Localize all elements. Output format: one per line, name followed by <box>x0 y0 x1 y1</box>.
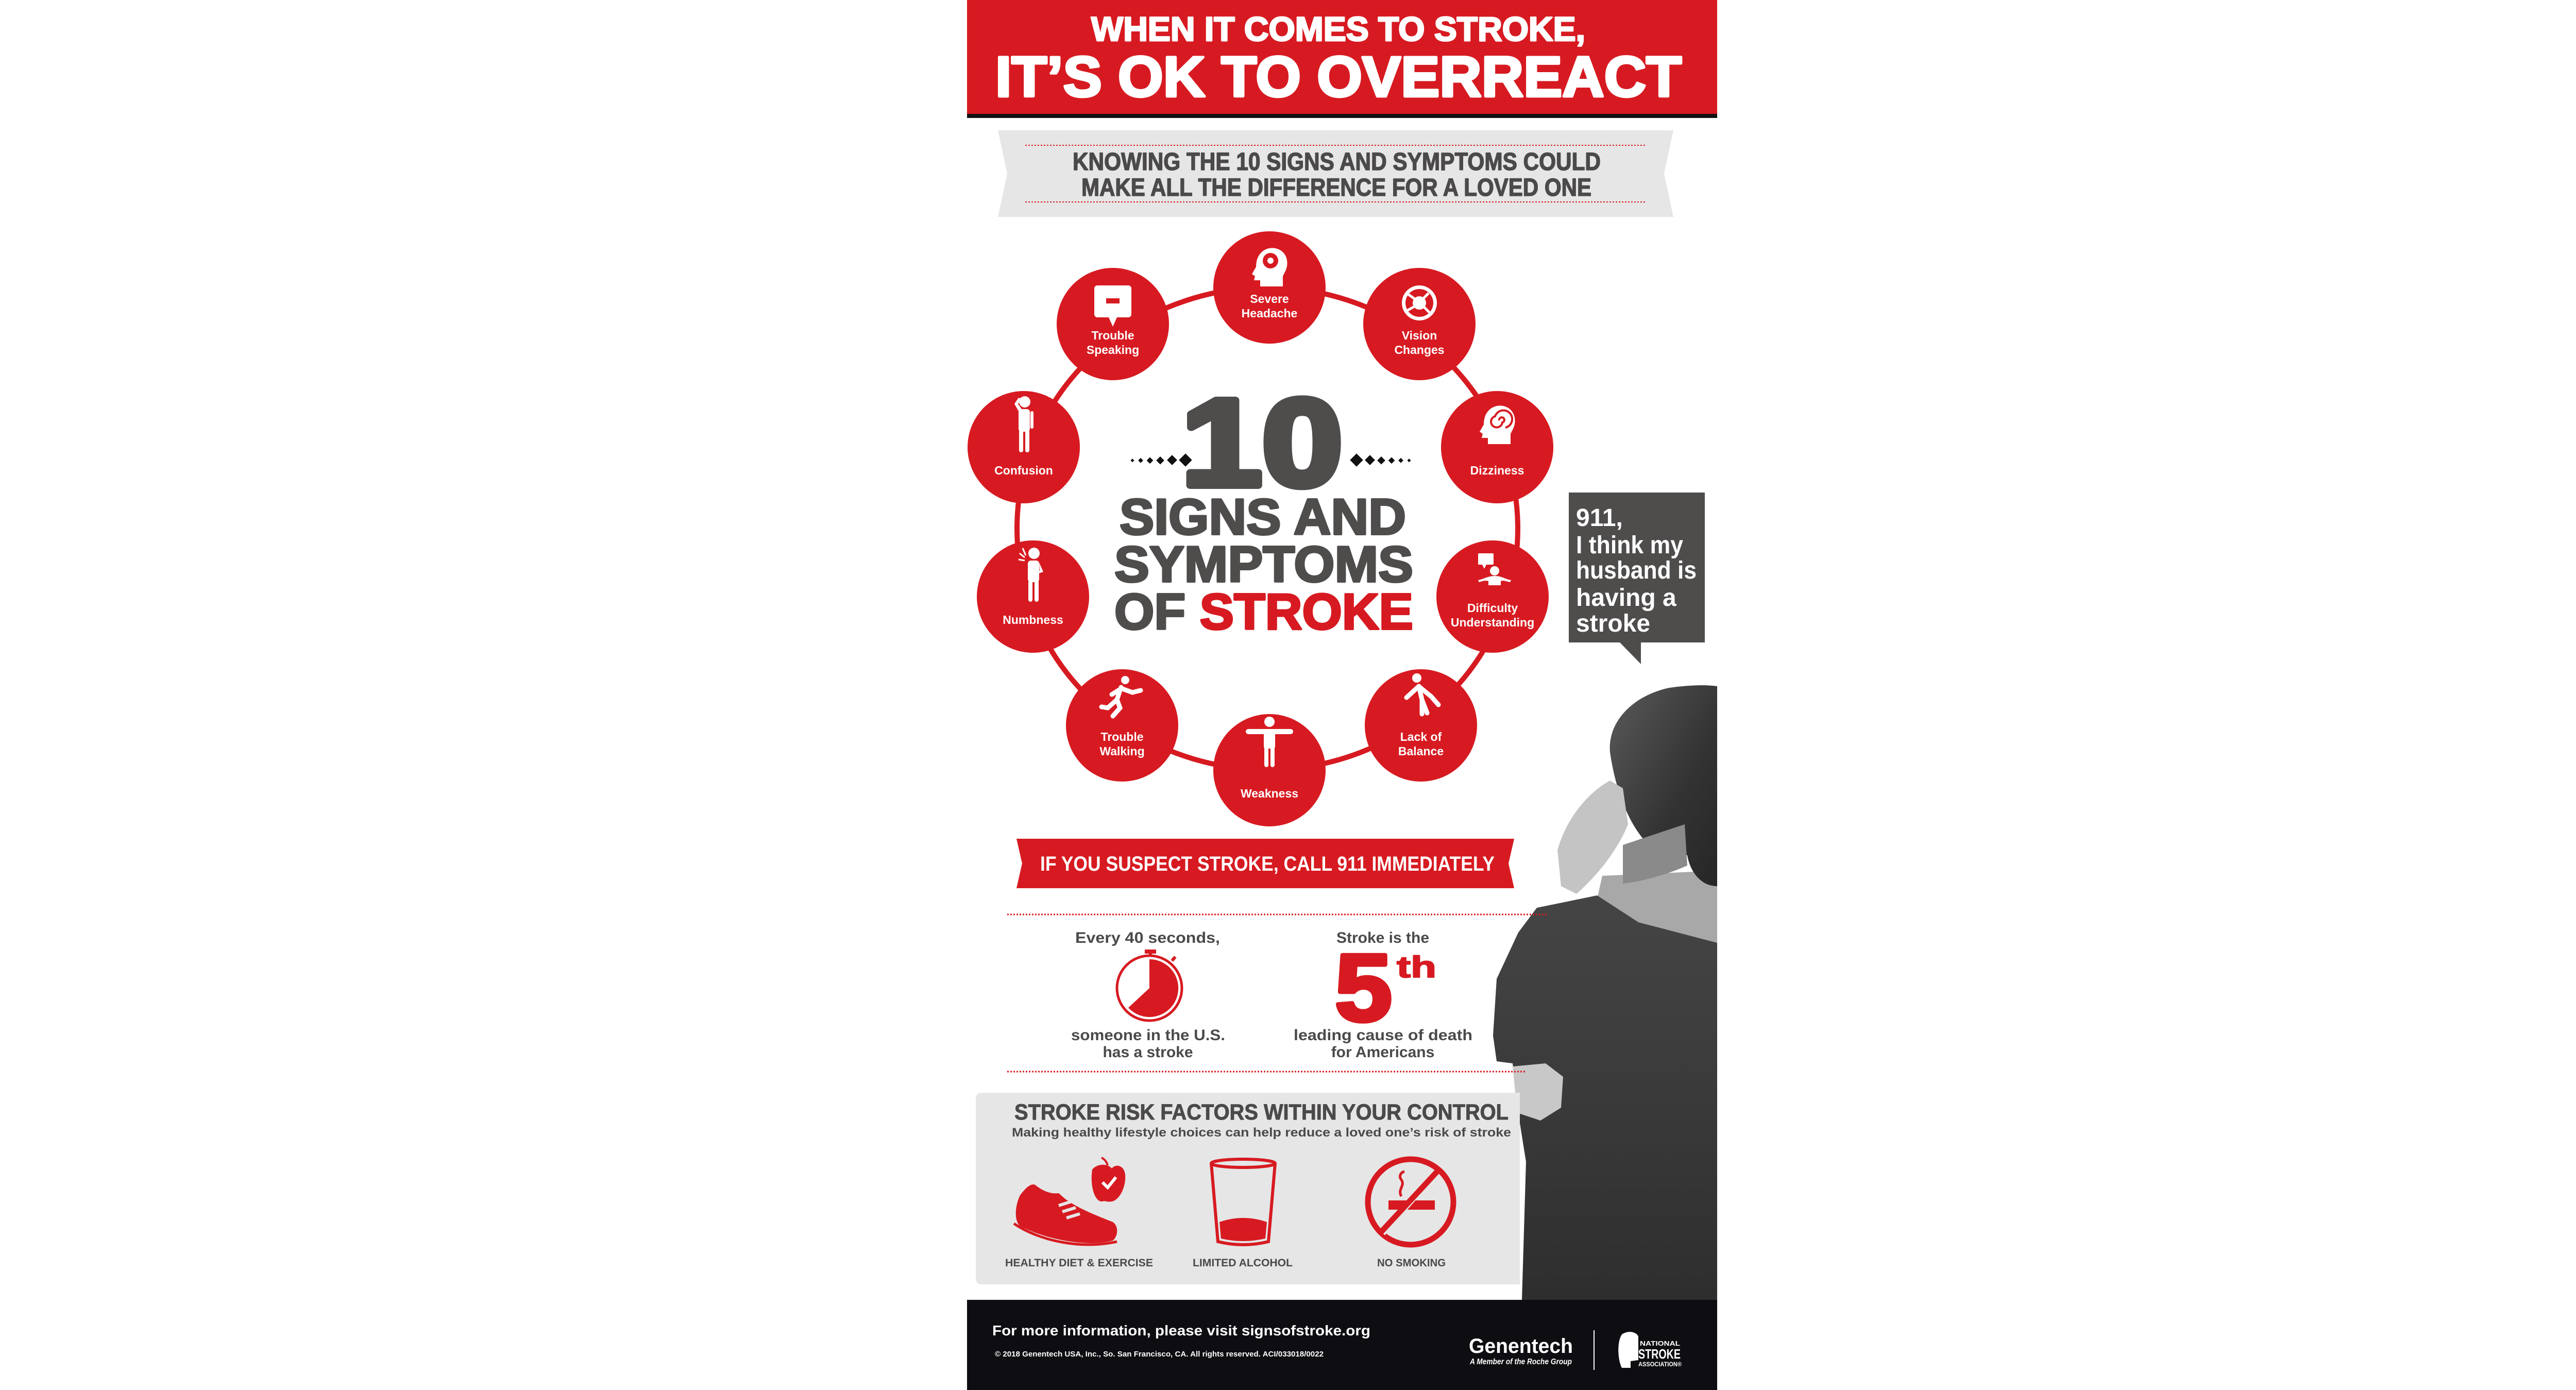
footer: For more information, please visit signsofstroke.org <box>992 1323 1370 1338</box>
symptom: dizziness <box>1441 391 1553 503</box>
symptom: lack of balance: Lack of <box>1400 730 1442 743</box>
symptom: weakness: Weakness <box>1241 787 1298 800</box>
title line 1: WHEN IT COMES TO STROKE, <box>1091 10 1585 48</box>
icon labels: HEALTHY DIET & EXERCISE <box>1005 1257 1153 1269</box>
panel: risk factors <box>976 1093 1520 1284</box>
logo: National Stroke Association: STROKE <box>1638 1346 1681 1362</box>
speech bubble: 911 call: I think my <box>1576 532 1683 559</box>
symptom: severe headache: Headache <box>1242 307 1297 320</box>
icon: person off balance <box>1406 673 1438 714</box>
icon: speech bubble <box>1094 285 1131 327</box>
logo: Genentech: Genentech <box>1469 1335 1573 1358</box>
stat: every 40 seconds <box>1071 929 1225 1061</box>
panel: risk factors: LIMITED ALCOHOL <box>1193 1257 1293 1269</box>
symptom: lack of balance <box>1365 669 1477 782</box>
symptom: vision changes <box>1363 268 1476 380</box>
icon: person scratching head <box>1014 396 1033 452</box>
speech bubble: 911 call <box>1569 493 1705 664</box>
speech bubble: 911 call: husband is <box>1576 557 1697 584</box>
icon: no smoking <box>1368 1159 1453 1245</box>
stat: every 40 seconds: has a stroke <box>1103 1044 1193 1061</box>
logo: Genentech: A Member of the Roche Group <box>1469 1358 1572 1366</box>
subtitle banner: KNOWING THE 10 SIGNS AND SYMPTOMS COULD <box>1073 148 1601 176</box>
center title: 10 signs and symptoms of stroke: OF STROKE <box>1114 583 1413 640</box>
icon: head with spiral <box>1480 405 1515 444</box>
symptom: trouble speaking <box>1057 268 1169 380</box>
speech bubble: 911 call: 911, <box>1576 504 1623 532</box>
symptom: trouble walking: Trouble <box>1100 730 1144 743</box>
symptom: lack of balance: Balance <box>1398 744 1444 758</box>
icon: stopwatch <box>1117 950 1182 1021</box>
hand at phone <box>1557 781 1628 894</box>
symptom: difficulty understanding <box>1436 540 1549 653</box>
center title: 10 signs and symptoms of stroke: SIGNS AND <box>1120 488 1406 545</box>
scarf <box>1623 824 1687 884</box>
sweater <box>1493 895 1717 1300</box>
symptom: confusion <box>968 391 1080 503</box>
icon: person stumbling <box>1101 676 1141 716</box>
speech bubble: 911 call: having a <box>1576 584 1676 612</box>
symptom: numbness <box>977 540 1089 653</box>
call 911 banner <box>1016 839 1514 888</box>
stat: 5th leading cause <box>1294 929 1472 1061</box>
hair <box>1610 685 1717 886</box>
symptom: confusion: Confusion <box>994 464 1053 477</box>
stat: 5th leading cause: leading cause of death <box>1294 1027 1472 1044</box>
logo: National Stroke Association: ASSOCIATION® <box>1638 1361 1682 1368</box>
symptom: difficulty understanding: Understanding <box>1451 616 1534 629</box>
center title: 10 signs and symptoms of stroke: 10 <box>1181 374 1343 512</box>
heading: STROKE RISK FACTORS WITHIN YOUR CONTROL <box>1014 1100 1509 1125</box>
symptom: trouble speaking: Speaking <box>1087 343 1139 357</box>
speech bubble: 911 call: stroke <box>1576 610 1650 637</box>
stat: 5th leading cause: 5 <box>1335 935 1392 1041</box>
footer: © 2018 Genentech USA, Inc., So. San Francisco, CA. All rights reserved. ACI/033018/0022 <box>995 1350 1324 1359</box>
icon: person with speech bubble <box>1478 553 1511 585</box>
center title: 10 signs and symptoms of stroke: SYMPTOMS <box>1114 536 1413 592</box>
icon: head with gear <box>1252 248 1287 286</box>
subtitle banner <box>998 130 1673 217</box>
title line 2: IT’S OK TO OVERREACT <box>995 45 1682 109</box>
symptom: dizziness: Dizziness <box>1470 464 1524 477</box>
skin of back/neck <box>1597 871 1717 943</box>
logo: National Stroke Association <box>1618 1332 1682 1368</box>
stat: every 40 seconds: Every 40 seconds, <box>1075 929 1220 946</box>
header banner <box>967 0 1717 118</box>
call 911 banner: IF YOU SUSPECT STROKE, CALL 911 IMMEDIATELY <box>1040 853 1495 875</box>
symptom: vision changes: Changes <box>1394 343 1445 357</box>
center title: 10 signs and symptoms of stroke <box>1114 374 1413 640</box>
hand at waist <box>1513 1063 1563 1121</box>
footer <box>967 1300 1717 1390</box>
symptom: severe headache <box>1213 231 1326 344</box>
symptom: weakness <box>1213 714 1326 826</box>
symptom: trouble walking <box>1066 669 1178 782</box>
photo: woman on phone (approximate silhouette) <box>1493 685 1717 1300</box>
stat: 5th leading cause: for Americans <box>1331 1044 1434 1061</box>
icon: shoe and apple <box>1014 1158 1125 1245</box>
symptom: vision changes: Vision <box>1402 329 1437 342</box>
symptom: difficulty understanding: Difficulty <box>1467 601 1518 615</box>
stat: 5th leading cause: Stroke is the <box>1336 929 1429 946</box>
icon: glass <box>1211 1159 1275 1245</box>
stat: 5th leading cause: th <box>1397 951 1436 984</box>
stat: every 40 seconds: someone in the U.S. <box>1071 1027 1225 1044</box>
ring connector <box>1017 287 1518 770</box>
subtitle banner: MAKE ALL THE DIFFERENCE FOR A LOVED ONE <box>1081 174 1591 201</box>
logo: National Stroke Association: NATIONAL <box>1640 1340 1680 1347</box>
icon: person arms out <box>1246 717 1293 767</box>
icon: person with tingling <box>1019 548 1043 602</box>
subheading: Making healthy lifestyle choices can help reduce a loved one’s risk of stroke <box>1012 1126 1511 1140</box>
icon: eye ring <box>1402 285 1437 320</box>
panel: risk factors: NO SMOKING <box>1377 1257 1446 1269</box>
symptom: trouble speaking: Trouble <box>1091 329 1134 342</box>
symptom: severe headache: Severe <box>1250 292 1289 306</box>
symptom: numbness: Numbness <box>1003 613 1063 626</box>
symptom: trouble walking: Walking <box>1099 744 1145 758</box>
